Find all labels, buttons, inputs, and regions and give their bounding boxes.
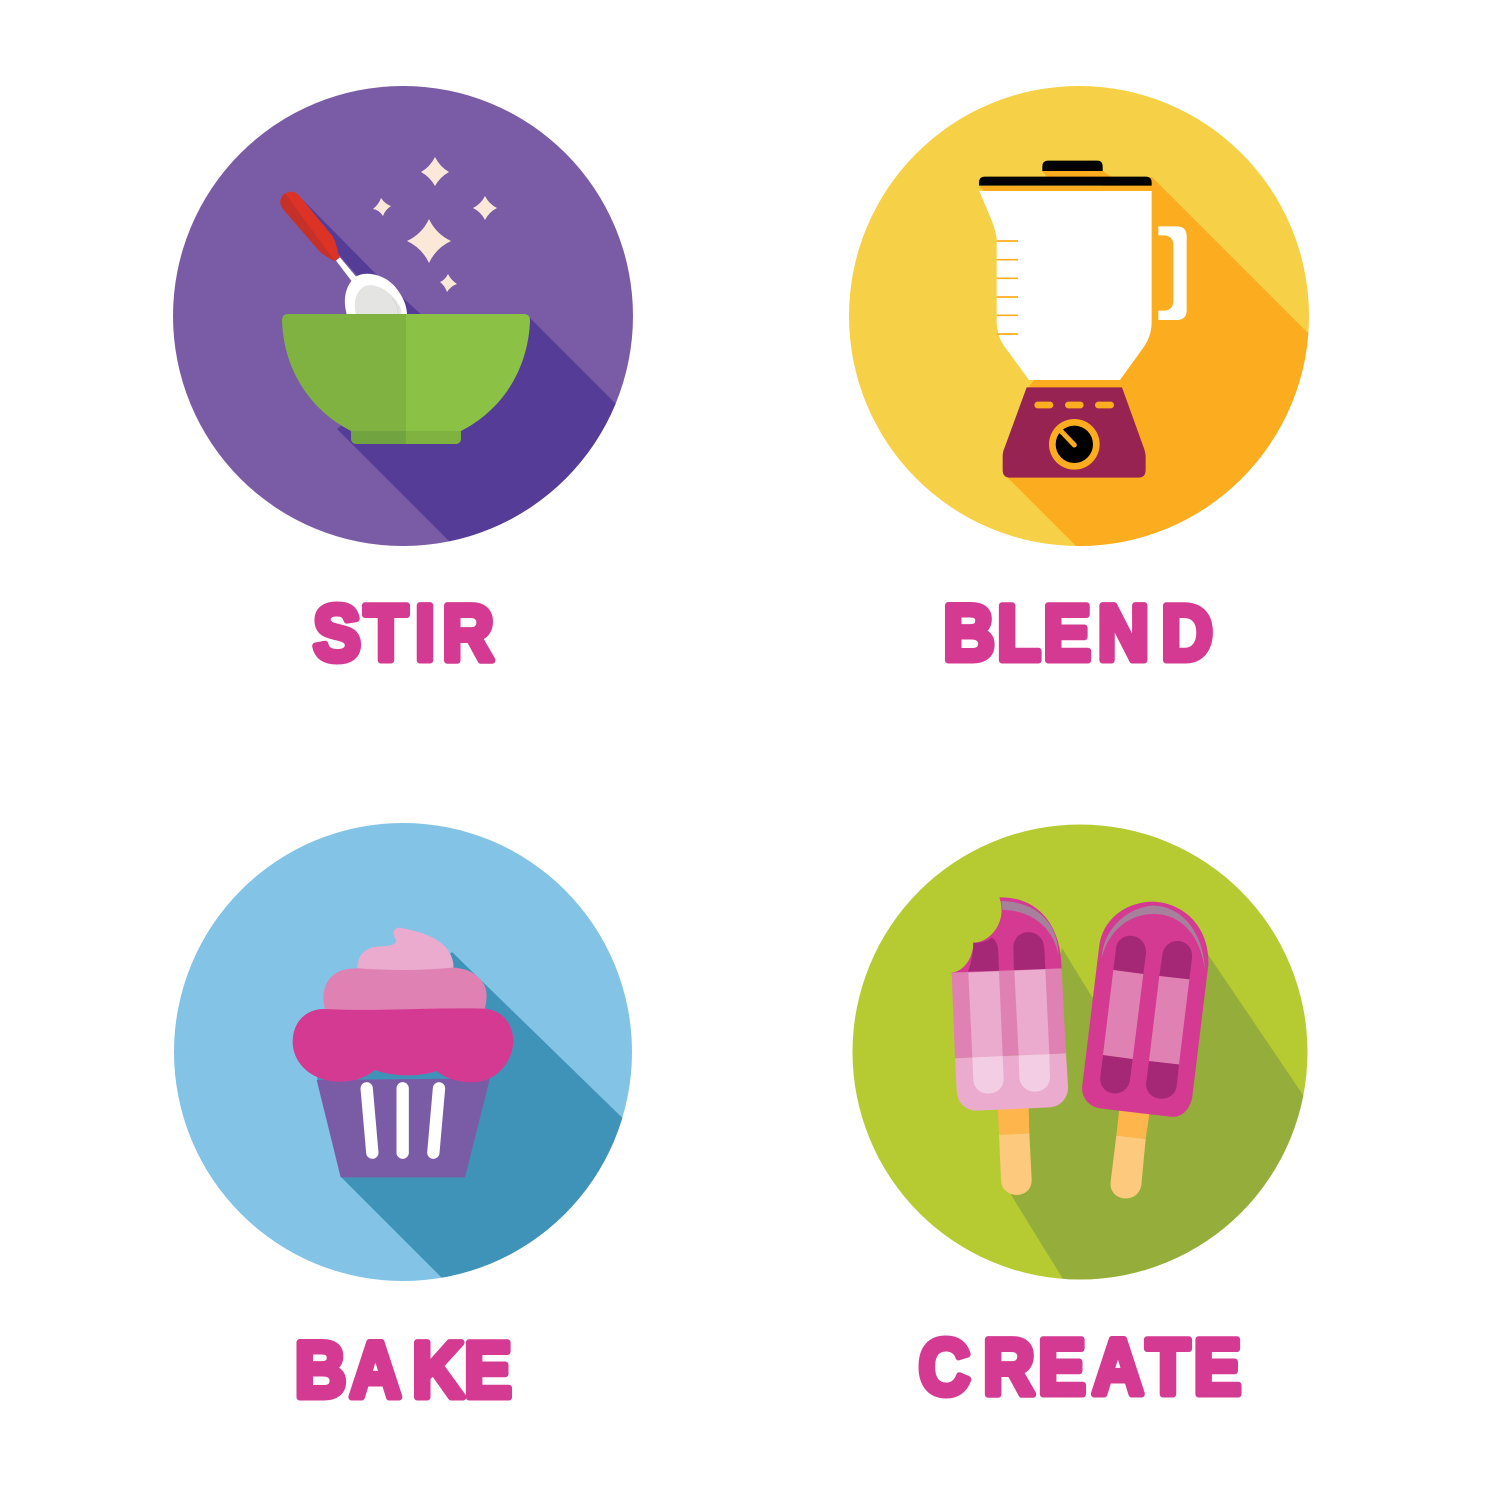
yellow circle background (849, 86, 1309, 546)
popsicle stick (998, 1105, 1029, 1135)
panel: create (852, 824, 1320, 1300)
icon: cupcake (293, 928, 513, 1177)
popsicle body (1082, 902, 1208, 1117)
jug handle (1158, 226, 1187, 320)
icon: spoon (280, 192, 407, 317)
long shadow (302, 198, 616, 542)
icon: blender (979, 161, 1187, 478)
cupcake wrapper (317, 1078, 490, 1177)
heading: CREATE: CREATE (919, 1323, 1241, 1411)
icon: bowl (282, 314, 530, 444)
measuring ticks (997, 241, 1018, 334)
long shadow (1010, 948, 1304, 1280)
icon: bitten popsicle (952, 897, 1068, 1195)
dial (1049, 419, 1100, 470)
long shadow (317, 952, 622, 1278)
top frosting (357, 928, 453, 970)
motor base (1003, 387, 1146, 478)
popsicle middle (952, 968, 1066, 1058)
base buttons (1034, 402, 1114, 408)
panel: blend (849, 86, 1309, 546)
popsicle stick (1116, 1108, 1150, 1139)
panel: bake (174, 823, 640, 1300)
icon: whole popsicle (1082, 902, 1208, 1198)
light slots (1103, 970, 1189, 1064)
bottom frosting (293, 1008, 513, 1082)
heading: STIR: STIR (313, 589, 494, 677)
long shadow (979, 171, 1308, 546)
icon: sparkles (373, 157, 497, 292)
popsicle bottom (955, 1053, 1068, 1111)
middle frosting (323, 968, 487, 1011)
purple circle background (173, 86, 633, 546)
blender jug (979, 191, 1152, 380)
dark slots (1100, 936, 1192, 1099)
popsicle top (952, 897, 1062, 974)
blue circle background (174, 823, 632, 1281)
panel: stir (173, 86, 633, 546)
heading: BAKE: BAKE (295, 1326, 512, 1414)
green circle background (852, 824, 1308, 1280)
blender lid (1042, 161, 1103, 171)
wrapper stripes (367, 1088, 439, 1153)
heading: BLEND: BLEND (943, 589, 1213, 677)
